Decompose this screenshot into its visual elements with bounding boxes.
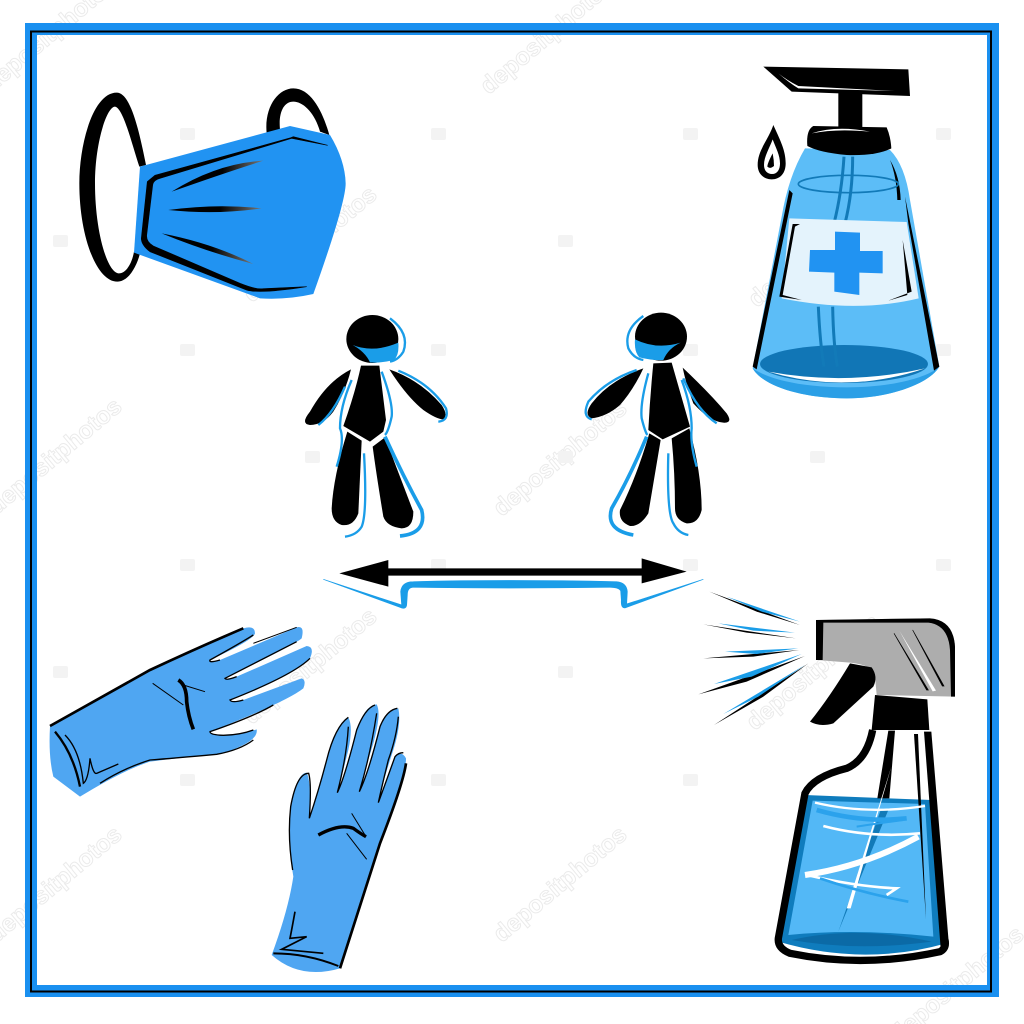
mask ear loops bbox=[79, 93, 146, 282]
face mask on person bbox=[635, 339, 681, 360]
bottom liquid bbox=[792, 933, 932, 946]
watermark layer: depositphotos bbox=[741, 609, 885, 736]
neck bbox=[872, 695, 929, 730]
mask creases bbox=[172, 161, 263, 192]
icon: glove vertical bbox=[272, 704, 406, 972]
mask body bbox=[134, 126, 346, 299]
pump head bbox=[763, 67, 910, 96]
watermark camera marks bbox=[53, 128, 951, 786]
tube bbox=[818, 157, 853, 367]
blue outline strokes bbox=[318, 318, 447, 537]
water swirls bbox=[805, 803, 925, 895]
straw bbox=[877, 731, 895, 798]
figure: right person bbox=[586, 313, 729, 535]
icon: face mask bbox=[79, 88, 346, 299]
liquid bbox=[760, 345, 928, 383]
sprayer head bbox=[816, 618, 955, 697]
watermark layer: depositphotos bbox=[488, 395, 632, 522]
icon: glove horizontal bbox=[50, 627, 312, 797]
figure: left person bbox=[305, 315, 447, 537]
icon: spray bottle bbox=[698, 592, 955, 960]
spray lines bbox=[698, 592, 808, 725]
mask seam bbox=[141, 137, 328, 291]
icon: pump bottle bbox=[753, 67, 939, 398]
watermark layer: depositphotos bbox=[238, 603, 382, 730]
watermark layer: depositphotos bbox=[238, 181, 382, 308]
blue outline strokes bbox=[586, 316, 717, 535]
trigger bbox=[810, 663, 875, 725]
label bbox=[782, 218, 919, 306]
water bbox=[778, 795, 946, 955]
icon: droplet bbox=[758, 125, 786, 179]
bottle outline bbox=[778, 730, 945, 960]
arrow: double-headed distance arrow bbox=[323, 558, 703, 608]
arrow blue shadow bbox=[323, 579, 703, 608]
bottle body bbox=[753, 148, 939, 398]
watermark layer: depositphotos bbox=[743, 186, 887, 313]
face mask on person bbox=[353, 343, 398, 363]
medical cross bbox=[809, 232, 883, 295]
watermark layer: depositphotos bbox=[488, 821, 632, 948]
